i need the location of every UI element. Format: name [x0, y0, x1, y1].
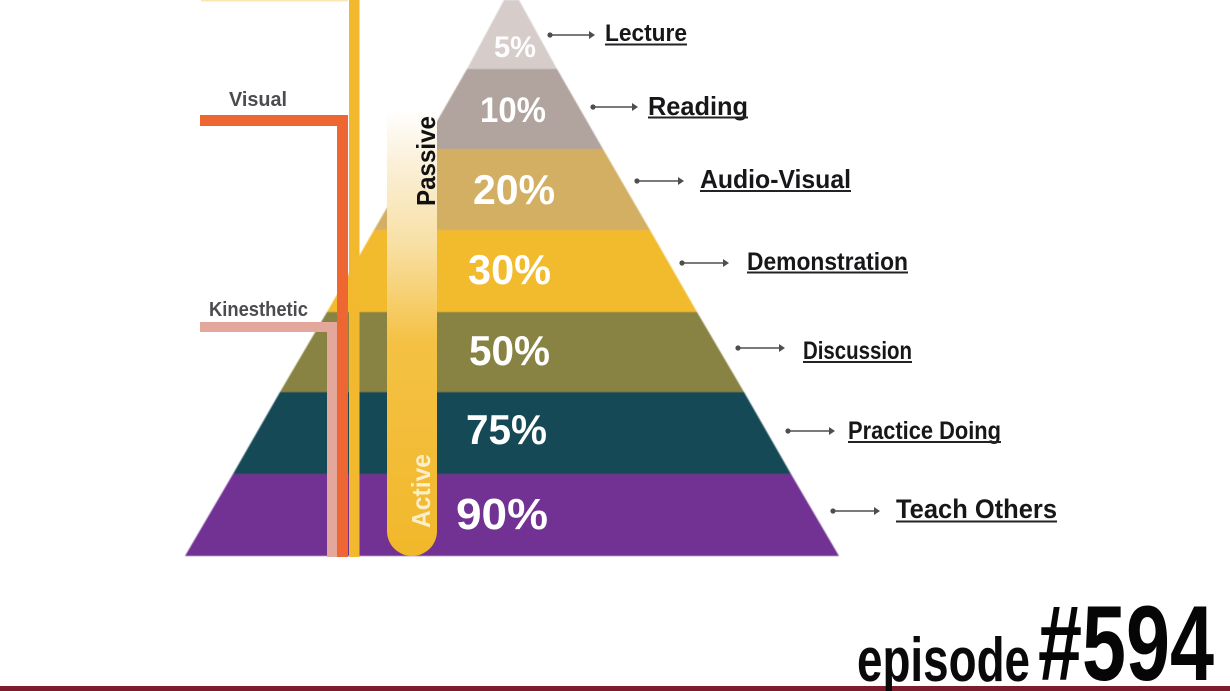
arrow [547, 31, 595, 39]
callout: Discussion [735, 337, 912, 365]
learning style bars [200, 0, 360, 557]
callout: Practice Doing [785, 417, 1001, 445]
percentages [456, 31, 555, 539]
arrow [679, 259, 729, 267]
5%: 5% [494, 31, 536, 64]
band: 90% teach others [185, 474, 839, 556]
band: 30% demonstration [327, 230, 697, 312]
arrow [634, 177, 684, 185]
arrow [830, 507, 880, 515]
episode badge [857, 583, 1214, 691]
bar: yellow vertical [349, 0, 360, 557]
pill shape [387, 110, 437, 556]
band: 5% lecture [467, 0, 557, 69]
callout: Audio-Visual [634, 164, 851, 194]
pyramid [185, 0, 839, 556]
10%: 10% [480, 91, 546, 130]
label: Audio-Visual [700, 164, 851, 194]
50%: 50% [469, 327, 550, 374]
label: Active: Active [406, 454, 436, 528]
callout: Reading [590, 91, 748, 121]
90%: 90% [456, 490, 548, 539]
label: Visual: Visual [229, 89, 287, 111]
band: 10% reading [421, 69, 603, 149]
bar: visual orange [200, 115, 348, 557]
band: 20% audio-visual [374, 149, 650, 230]
label: Lecture [605, 20, 687, 47]
band: 50% discussion [280, 312, 744, 392]
label: Kinesthetic: Kinesthetic [209, 299, 308, 321]
20%: 20% [473, 166, 555, 213]
callout: Teach Others [830, 494, 1057, 524]
label: Passive: Passive [411, 116, 441, 206]
bar: kinesthetic pink [200, 322, 337, 557]
label: Reading [648, 91, 748, 121]
arrow [590, 103, 638, 111]
arrow [785, 427, 835, 435]
30%: 30% [468, 246, 551, 293]
75%: 75% [466, 406, 547, 453]
bottom bar [0, 686, 1230, 691]
label: Demonstration [747, 248, 908, 276]
bar: top auditory stub [201, 0, 348, 2]
band: 75% practice doing [233, 392, 791, 474]
label: Practice Doing [848, 417, 1001, 445]
arrow [735, 344, 785, 352]
callout: Lecture [547, 20, 687, 47]
label: Teach Others [896, 494, 1057, 524]
callout: Demonstration [679, 248, 908, 276]
passive to active pill [387, 110, 441, 556]
label: Discussion [803, 337, 912, 365]
